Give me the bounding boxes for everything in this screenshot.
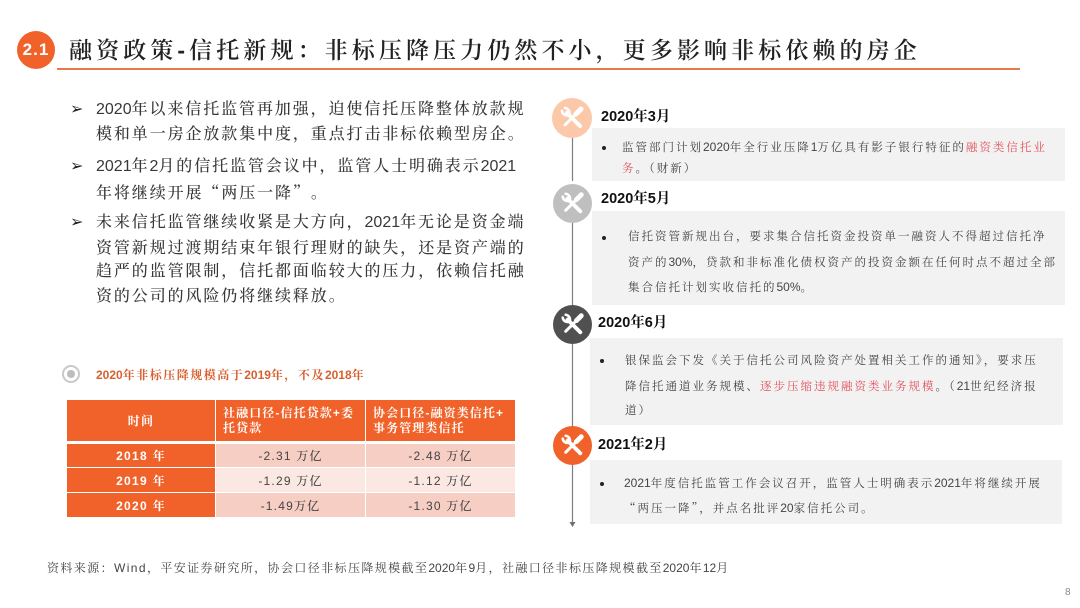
table: non-standard reduction scale: -1.29 万亿 — [258, 474, 323, 488]
table: non-standard reduction scale: -1.30 万亿 — [408, 498, 473, 512]
panel: May 2020 — [592, 211, 1065, 305]
panel: June 2020 — [590, 338, 1063, 425]
icon: tools, February 2021 — [553, 426, 592, 465]
panel: June 2020: 降信托通道业务规模、逐步压缩违规融资类业务规模。（21世纪经济报 — [625, 379, 1038, 393]
panel: June 2020: 道） — [625, 405, 652, 417]
panel: March 2020: 务。（财新） — [622, 163, 697, 175]
date heading: June 2020: 2020年6月 — [598, 315, 667, 331]
date heading: May 2020: 2020年5月 — [601, 191, 670, 207]
text block: key points — [70, 99, 526, 305]
table: non-standard reduction scale: -1.49万亿 — [261, 498, 320, 512]
table: non-standard reduction scale: 2020 年 — [116, 498, 166, 512]
text block: key points: 模和单一房企放款集中度，重点打击非标依赖型房企。 — [96, 126, 526, 143]
text block: key points: 资管新规过渡期结束年银行理财的缺失，还是资产端的 — [96, 240, 526, 257]
text block: key points: 2021年2月的信托监管会议中，监管人士明确表示2021 — [96, 158, 516, 175]
panel: March 2020: 监管部门计划2020年全行业压降1万亿具有影子银行特征的融资类信托业 — [622, 140, 1047, 154]
title underline — [57, 68, 1020, 70]
text block: key points: ➢ — [70, 99, 83, 118]
date heading: March 2020: 2020年3月 — [601, 109, 670, 125]
text block: key points: 未来信托监管继续收紧是大方向，2021年无论是资金端 — [96, 214, 525, 231]
text block: key points: ➢ — [70, 212, 83, 231]
page number: 8 — [1065, 587, 1071, 598]
section number badge — [17, 31, 55, 69]
table: non-standard reduction scale: 托贷款 — [223, 420, 262, 434]
section number badge: 2.1 — [23, 40, 49, 59]
icon: radio marker — [62, 365, 80, 383]
table heading: 2020年非标压降规模高于2019年，不及2018年 — [96, 368, 365, 382]
table: non-standard reduction scale: -2.48 万亿 — [408, 449, 473, 463]
table: non-standard reduction scale: 协会口径-融资类信托+ — [373, 406, 504, 420]
panel: March 2020 — [592, 128, 1065, 181]
panel: June 2020: 银保监会下发《关于信托公司风险资产处置相关工作的通知》，要求压 — [625, 355, 1038, 367]
icon: tools, June 2020 — [553, 305, 592, 344]
panel: February 2021 — [590, 460, 1062, 524]
text block: key points: 趋严的监管限制，信托都面临较大的压力，依赖信托融 — [96, 263, 526, 280]
table: non-standard reduction scale — [67, 400, 515, 517]
icon: tools, May 2020 — [553, 184, 592, 223]
text block: key points: ➢ — [70, 156, 83, 175]
panel: May 2020: 信托资管新规出台，要求集合信托资金投资单一融资人不得超过信托净 — [628, 231, 1046, 243]
table: non-standard reduction scale: 事务管理类信托 — [373, 420, 465, 434]
text block: key points: 2020年以来信托监管再加强，迫使信托压降整体放款规 — [96, 101, 525, 118]
table: non-standard reduction scale: 社融口径-信托贷款+委 — [223, 406, 354, 420]
table: non-standard reduction scale: -1.12 万亿 — [408, 474, 473, 488]
text block: key points: 资的公司的风险仍将继续释放。 — [96, 288, 347, 305]
source note: 资料来源：Wind，平安证券研究所，协会口径非标压降规模截至2020年9月，社融口径非标压降规模截至2020年12月 — [47, 561, 730, 575]
panel: February 2021: “两压一降”，并点名批评20家信托公司。 — [624, 500, 875, 516]
panel: February 2021: 2021年度信托监管工作会议召开，监管人士明确表示2021年将继续开展 — [624, 476, 1042, 490]
text block: key points: 年将继续开展“两压一降”。 — [96, 180, 329, 203]
panel: May 2020: 资产的30%，贷款和非标准化债权资产的投资金额在任何时点不超过全部 — [628, 255, 1057, 269]
table: non-standard reduction scale: 时间 — [128, 414, 154, 428]
table: non-standard reduction scale: 2018 年 — [116, 449, 166, 463]
panel: May 2020: 集合信托计划实收信托的50%。 — [628, 280, 814, 294]
icon: tools, March 2020 — [552, 98, 592, 138]
date heading: February 2021: 2021年2月 — [598, 437, 667, 453]
title: 融资政策-信托新规：非标压降压力仍然不小，更多影响非标依赖的房企 — [69, 37, 921, 63]
table: non-standard reduction scale: 2019 年 — [116, 474, 166, 488]
table: non-standard reduction scale: -2.31 万亿 — [258, 449, 323, 463]
timeline axis arrow — [570, 138, 576, 527]
